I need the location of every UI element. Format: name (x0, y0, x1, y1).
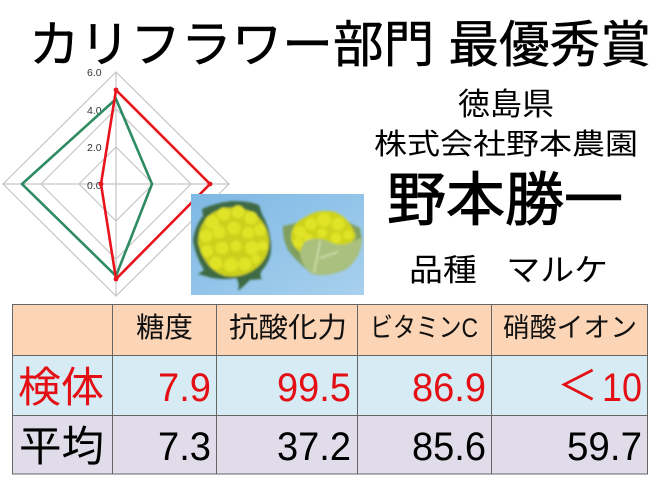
average row values: 59.7 (567, 425, 642, 469)
variety: 品種 マルケ (409, 253, 608, 288)
right cauliflower outer leaves (283, 221, 362, 275)
header row (12, 304, 648, 355)
average row (12, 415, 648, 474)
axis labels: 4.0 (87, 105, 102, 117)
column headers: ビタミンC (370, 313, 478, 343)
left cauliflower head (198, 208, 269, 277)
photo: two cauliflowers (191, 194, 364, 295)
series: average (green) (22, 99, 152, 276)
title: カリフラワー部門 最優秀賞 (29, 17, 651, 73)
axis labels: 2.0 (87, 142, 102, 154)
results table (12, 304, 648, 474)
sample row values: 検体 (18, 364, 104, 411)
sample row values (18, 363, 642, 411)
axis labels: 6.0 (87, 67, 102, 79)
average row values: 85.6 (412, 425, 486, 469)
average row values (19, 423, 642, 470)
sample row values: 86.9 (412, 366, 486, 410)
producer info (374, 87, 638, 288)
table grid (12, 304, 648, 474)
average row values: 平均 (19, 423, 104, 470)
prefecture: 徳島県 (458, 87, 554, 122)
sample row values: 99.5 (277, 366, 351, 410)
sample row (12, 355, 648, 415)
column headers (136, 312, 637, 343)
sample row values: 10 (602, 366, 642, 410)
producer name: 野本勝一 (387, 168, 623, 233)
sample row values: ＜ (557, 363, 598, 409)
axis labels (87, 67, 102, 192)
column headers: 抗酸化力 (229, 312, 347, 343)
sample row values: 7.9 (158, 366, 211, 410)
axis labels: 0.0 (87, 180, 102, 192)
company: 株式会社野本農園 (374, 128, 638, 161)
average row values: 37.2 (277, 425, 351, 469)
right cauliflower front leaf (300, 238, 362, 275)
left cauliflower leaves (193, 201, 271, 291)
average row values: 7.3 (158, 425, 211, 469)
column headers: 硝酸イオン (503, 313, 637, 343)
right cauliflower head (291, 211, 356, 256)
series: sample (red) (99, 88, 212, 281)
radar chart (3, 67, 229, 296)
column headers: 糖度 (136, 312, 193, 343)
